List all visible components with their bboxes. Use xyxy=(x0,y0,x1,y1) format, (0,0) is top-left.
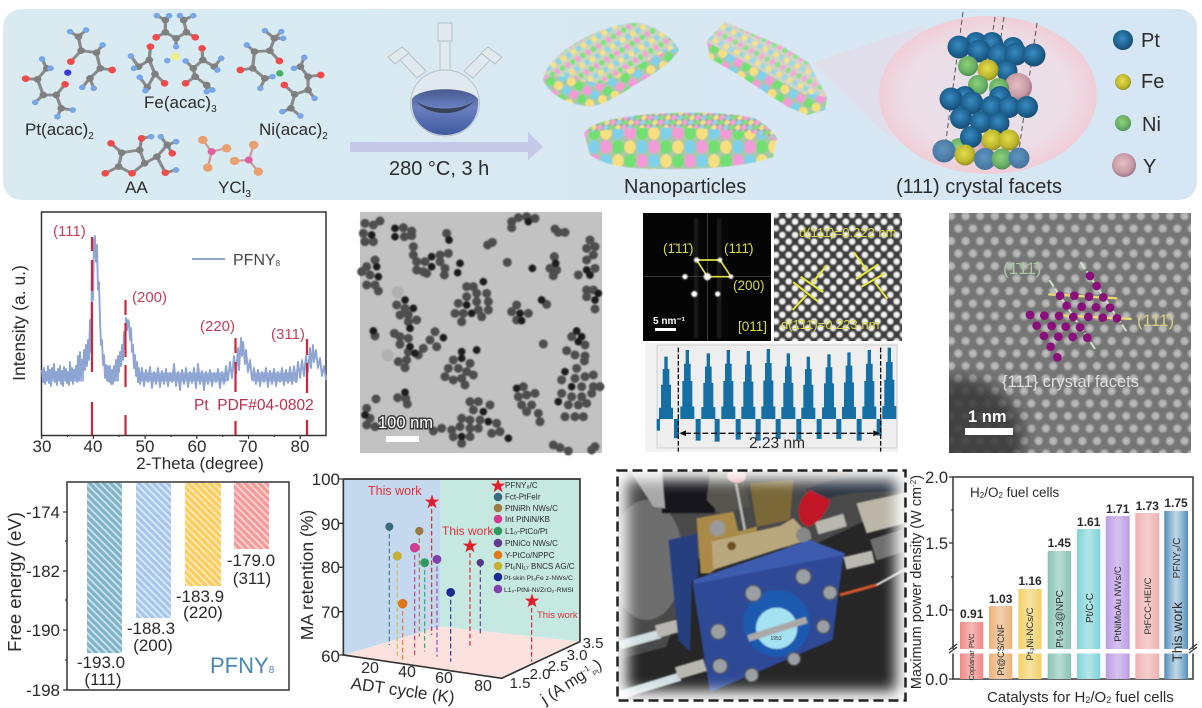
FFT labels: (111̄) xyxy=(724,241,754,256)
FFT labels: (1̄11̄) xyxy=(663,241,694,256)
power density axis: Maximum power density (W cm xyxy=(909,487,925,689)
XRD legend: 8 xyxy=(276,259,281,268)
XRD curve xyxy=(42,236,326,390)
profile distance label: 2.23 nm xyxy=(749,435,805,452)
drop lines xyxy=(389,502,532,662)
free energy values: -183.9 xyxy=(176,587,224,606)
XRD peak labels: (111) xyxy=(53,223,86,240)
legend: elements: Ni xyxy=(1142,114,1161,136)
image: TEM micrograph xyxy=(360,212,602,453)
HRTEM labels: {111} crystal facets xyxy=(1002,373,1139,391)
free energy values: -188.3 xyxy=(127,619,175,638)
power density values: 1.71 xyxy=(1106,502,1130,516)
XRD axes: 80 xyxy=(291,437,309,456)
FFT labels: 5 nm⁻¹ xyxy=(653,316,686,327)
3D chart axes: -1 xyxy=(580,663,592,675)
nanoparticle: top right xyxy=(707,22,827,115)
precursor labels: AA xyxy=(125,178,148,197)
catalyst names: Coplanar Pt/C xyxy=(967,633,976,681)
power density annotations: fuel cells xyxy=(1003,485,1059,500)
this work labels xyxy=(368,484,578,621)
this work labels: This work xyxy=(368,484,422,498)
3D chart axes: 1.5 xyxy=(510,675,530,692)
image: atomic resolution lattice xyxy=(774,213,902,341)
legend: elements: Pt xyxy=(1141,30,1160,52)
3D chart legend: PtNiCo NWs/C xyxy=(505,539,558,548)
free energy values: -179.0 xyxy=(227,551,275,570)
3D chart axes: 100 xyxy=(312,470,340,489)
power density annotations: H xyxy=(970,485,980,500)
3D chart axes: 20 xyxy=(361,660,379,677)
catalyst names: PtFCC-HEI/C xyxy=(1143,577,1154,634)
power density annotations: fuel cells xyxy=(1111,689,1174,706)
power density axis: 2.0 xyxy=(925,469,948,487)
power density annotations xyxy=(970,485,1174,706)
crystal lattice atoms xyxy=(932,12,1046,170)
precursor labels: YCl xyxy=(218,178,245,197)
power density values: 1.16 xyxy=(1018,574,1042,588)
image: FFT pattern xyxy=(643,213,771,341)
molecular precursors xyxy=(25,16,328,200)
power density bars xyxy=(950,511,1196,679)
this work labels: This work xyxy=(442,524,494,538)
XRD axes: 60 xyxy=(188,437,206,456)
power density annotations: 2 xyxy=(980,491,985,500)
FFT labels: (200) xyxy=(733,278,765,293)
lattice spacing labels: d(111̄)=0.222 nm xyxy=(799,225,896,240)
HRTEM labels: (111̄) xyxy=(1137,311,1174,330)
precursor labels: Ni(acac) xyxy=(259,120,322,139)
3D chart legend: Pt-skin Pt₃Fe z-NWs/C xyxy=(504,575,573,582)
precursor labels: 3 xyxy=(245,189,251,200)
3D chart axes: ADT cycle (K) xyxy=(350,674,456,707)
3D chart legend: PtNiRh NWs/C xyxy=(505,504,558,513)
3D chart axes: 60 xyxy=(435,670,453,687)
XRD axes: 30 xyxy=(33,437,51,456)
logo text: 1953 xyxy=(770,636,782,642)
power density annotations: 2 xyxy=(1085,695,1090,705)
nanoparticle: bottom xyxy=(584,113,777,169)
catalyst names: Pt-9.3@NPC xyxy=(1055,590,1066,648)
power density axis: 1.5 xyxy=(925,535,948,553)
XRD axes xyxy=(9,265,309,473)
precursor labels: 2 xyxy=(322,131,328,142)
free energy axis: -174 xyxy=(26,503,60,522)
XRD reference lines xyxy=(92,237,307,435)
XRD axes: Intensity (a. u.) xyxy=(9,265,29,381)
precursor labels: 3 xyxy=(211,104,217,115)
TEM scale: 100 nm xyxy=(378,414,433,432)
power density values: 1.75 xyxy=(1164,496,1188,510)
free energy values: (220) xyxy=(183,603,223,622)
3D chart legend: L1₀-PtCo/Pt xyxy=(505,527,548,536)
power density annotations: /O xyxy=(1090,689,1106,706)
free energy values xyxy=(77,551,275,689)
free energy values: (311) xyxy=(233,569,271,588)
legend: elements xyxy=(1112,30,1164,178)
3D chart legend: L1₀-PtNi-Ni/ZrO₂-RMSI xyxy=(504,587,574,594)
power density axis: 1.0 xyxy=(925,602,948,620)
power density axis: 0.0 xyxy=(925,671,948,689)
free energy bars xyxy=(87,483,269,653)
FFT labels xyxy=(653,241,767,334)
catalyst names: Pt₃Ni-NCs/C xyxy=(1025,607,1036,660)
HRTEM labels: (1̄11̄) xyxy=(1003,259,1041,278)
3D chart axes: 2.5 xyxy=(548,658,568,675)
3D chart legend: Pt₆Ni₁₇ BNCS AG/C xyxy=(505,562,575,571)
chart: maximum power density bars xyxy=(909,469,1197,706)
zoom bubble xyxy=(811,16,1097,174)
free energy axis: Free energy (eV) xyxy=(4,512,25,652)
chart: XRD pattern xyxy=(9,212,326,473)
3D chart axes: 40 xyxy=(398,664,416,681)
power density values: 1.61 xyxy=(1077,515,1101,529)
catalyst names: Pt/C-C xyxy=(1085,593,1096,623)
power density values: 1.45 xyxy=(1048,536,1071,550)
3D chart axes: 70 xyxy=(321,603,340,622)
power density annotations: /O xyxy=(984,485,998,500)
chart: 3D MA retention xyxy=(297,470,606,708)
legend: elements: Y xyxy=(1143,156,1156,178)
catalyst names xyxy=(967,538,1185,681)
free energy values: (200) xyxy=(133,636,173,655)
free energy axis: -198 xyxy=(26,681,60,700)
lattice spacing labels: d(1̄11̄)=0.223 nm xyxy=(781,317,879,332)
chart: free energy bars xyxy=(4,482,289,700)
3D chart axes: j (A mg xyxy=(538,667,589,708)
catalyst names: Pt@CS/CNF xyxy=(996,624,1006,676)
power density values: 1.73 xyxy=(1136,499,1159,513)
this work labels: This work xyxy=(537,610,578,621)
power density axis xyxy=(909,469,1197,689)
free energy values: -193.0 xyxy=(77,653,125,672)
XRD legend xyxy=(192,252,281,269)
3D chart axes: 60 xyxy=(321,647,340,666)
3D chart axes: 90 xyxy=(321,515,340,534)
3D chart axes xyxy=(297,470,606,708)
catalyst names: This work xyxy=(1169,601,1185,662)
3D chart axes: 3.5 xyxy=(583,635,603,652)
HRTEM labels xyxy=(965,259,1174,435)
free energy sample label: PFNY8 xyxy=(210,653,275,678)
XRD axes: 2-Theta (degree) xyxy=(136,454,264,473)
reaction conditions: 280 °C, 3 h xyxy=(389,158,489,180)
XRD legend: PFNY xyxy=(233,252,276,269)
3D chart axes: Pt xyxy=(592,668,601,678)
free energy axis xyxy=(4,503,67,700)
power density values: 0.91 xyxy=(960,607,984,621)
power density values xyxy=(960,496,1188,621)
3D chart axes: 80 xyxy=(321,558,340,577)
XRD peak labels: (311) xyxy=(271,326,305,343)
XRD axes: 50 xyxy=(136,437,154,456)
precursor labels: 2 xyxy=(88,131,94,142)
3D chart legend xyxy=(491,478,575,594)
3D chart axes: 2.0 xyxy=(530,666,550,683)
XRD peak labels: (200) xyxy=(132,289,167,306)
power density annotations: 2 xyxy=(1106,695,1111,705)
lattice spacing labels xyxy=(781,225,896,332)
power density axis: ) xyxy=(909,475,925,480)
3D chart legend: PFNY₈/C xyxy=(505,481,538,490)
XRD peak labels: Pt PDF#04-0802 xyxy=(194,397,314,414)
3D chart axes: 80 xyxy=(474,678,492,695)
free energy axis: -190 xyxy=(26,621,60,640)
XRD peak labels xyxy=(53,223,314,414)
panel: synthesis scheme xyxy=(3,9,1197,200)
chart: line profile xyxy=(645,343,898,452)
facets label: (111) crystal facets xyxy=(896,176,1062,198)
XRD peak labels: (220) xyxy=(200,318,235,335)
precursor labels: Fe(acac) xyxy=(144,93,211,112)
icon: three-neck flask xyxy=(388,23,502,136)
nanoparticles illustration xyxy=(543,22,827,169)
data points xyxy=(385,523,484,608)
image: HRTEM with facets xyxy=(949,213,1191,453)
catalyst names: PFNY₈/C xyxy=(1172,538,1183,578)
power density axis: -2 xyxy=(909,479,918,487)
precursor labels xyxy=(25,93,328,200)
3D chart axes: 3.0 xyxy=(567,647,587,664)
catalyst names: PtNiMoAu NWs/C xyxy=(1113,566,1124,642)
FFT labels: [011] xyxy=(738,319,767,334)
photo: fuel cell device xyxy=(610,469,910,701)
power density values: 1.03 xyxy=(989,592,1013,606)
free energy axis: -182 xyxy=(26,562,60,581)
arrow: reaction xyxy=(350,132,543,160)
3D chart axes: ) xyxy=(591,656,605,674)
3D chart legend: Int PtNiN/KB xyxy=(505,515,550,524)
power density annotations: 2 xyxy=(998,491,1003,500)
XRD axes: 70 xyxy=(239,437,257,456)
legend: elements: Fe xyxy=(1141,71,1164,93)
TEM scale xyxy=(378,414,433,442)
nanoparticle: top left xyxy=(543,23,679,106)
3D chart legend: Y-PtCo/NPPC xyxy=(505,551,555,560)
3D chart axes: MA retention (%) xyxy=(297,510,317,640)
free energy values: (111) xyxy=(84,670,122,689)
HRTEM labels: 1 nm xyxy=(968,408,1007,426)
power density annotations: Catalysts for H xyxy=(987,689,1085,706)
XRD axes: 40 xyxy=(84,437,102,456)
stars: this work xyxy=(425,494,539,607)
precursor labels: Pt(acac) xyxy=(25,120,88,139)
3D chart legend: Fct-PtFeIr xyxy=(505,492,541,502)
nanoparticles label: Nanoparticles xyxy=(624,176,746,198)
